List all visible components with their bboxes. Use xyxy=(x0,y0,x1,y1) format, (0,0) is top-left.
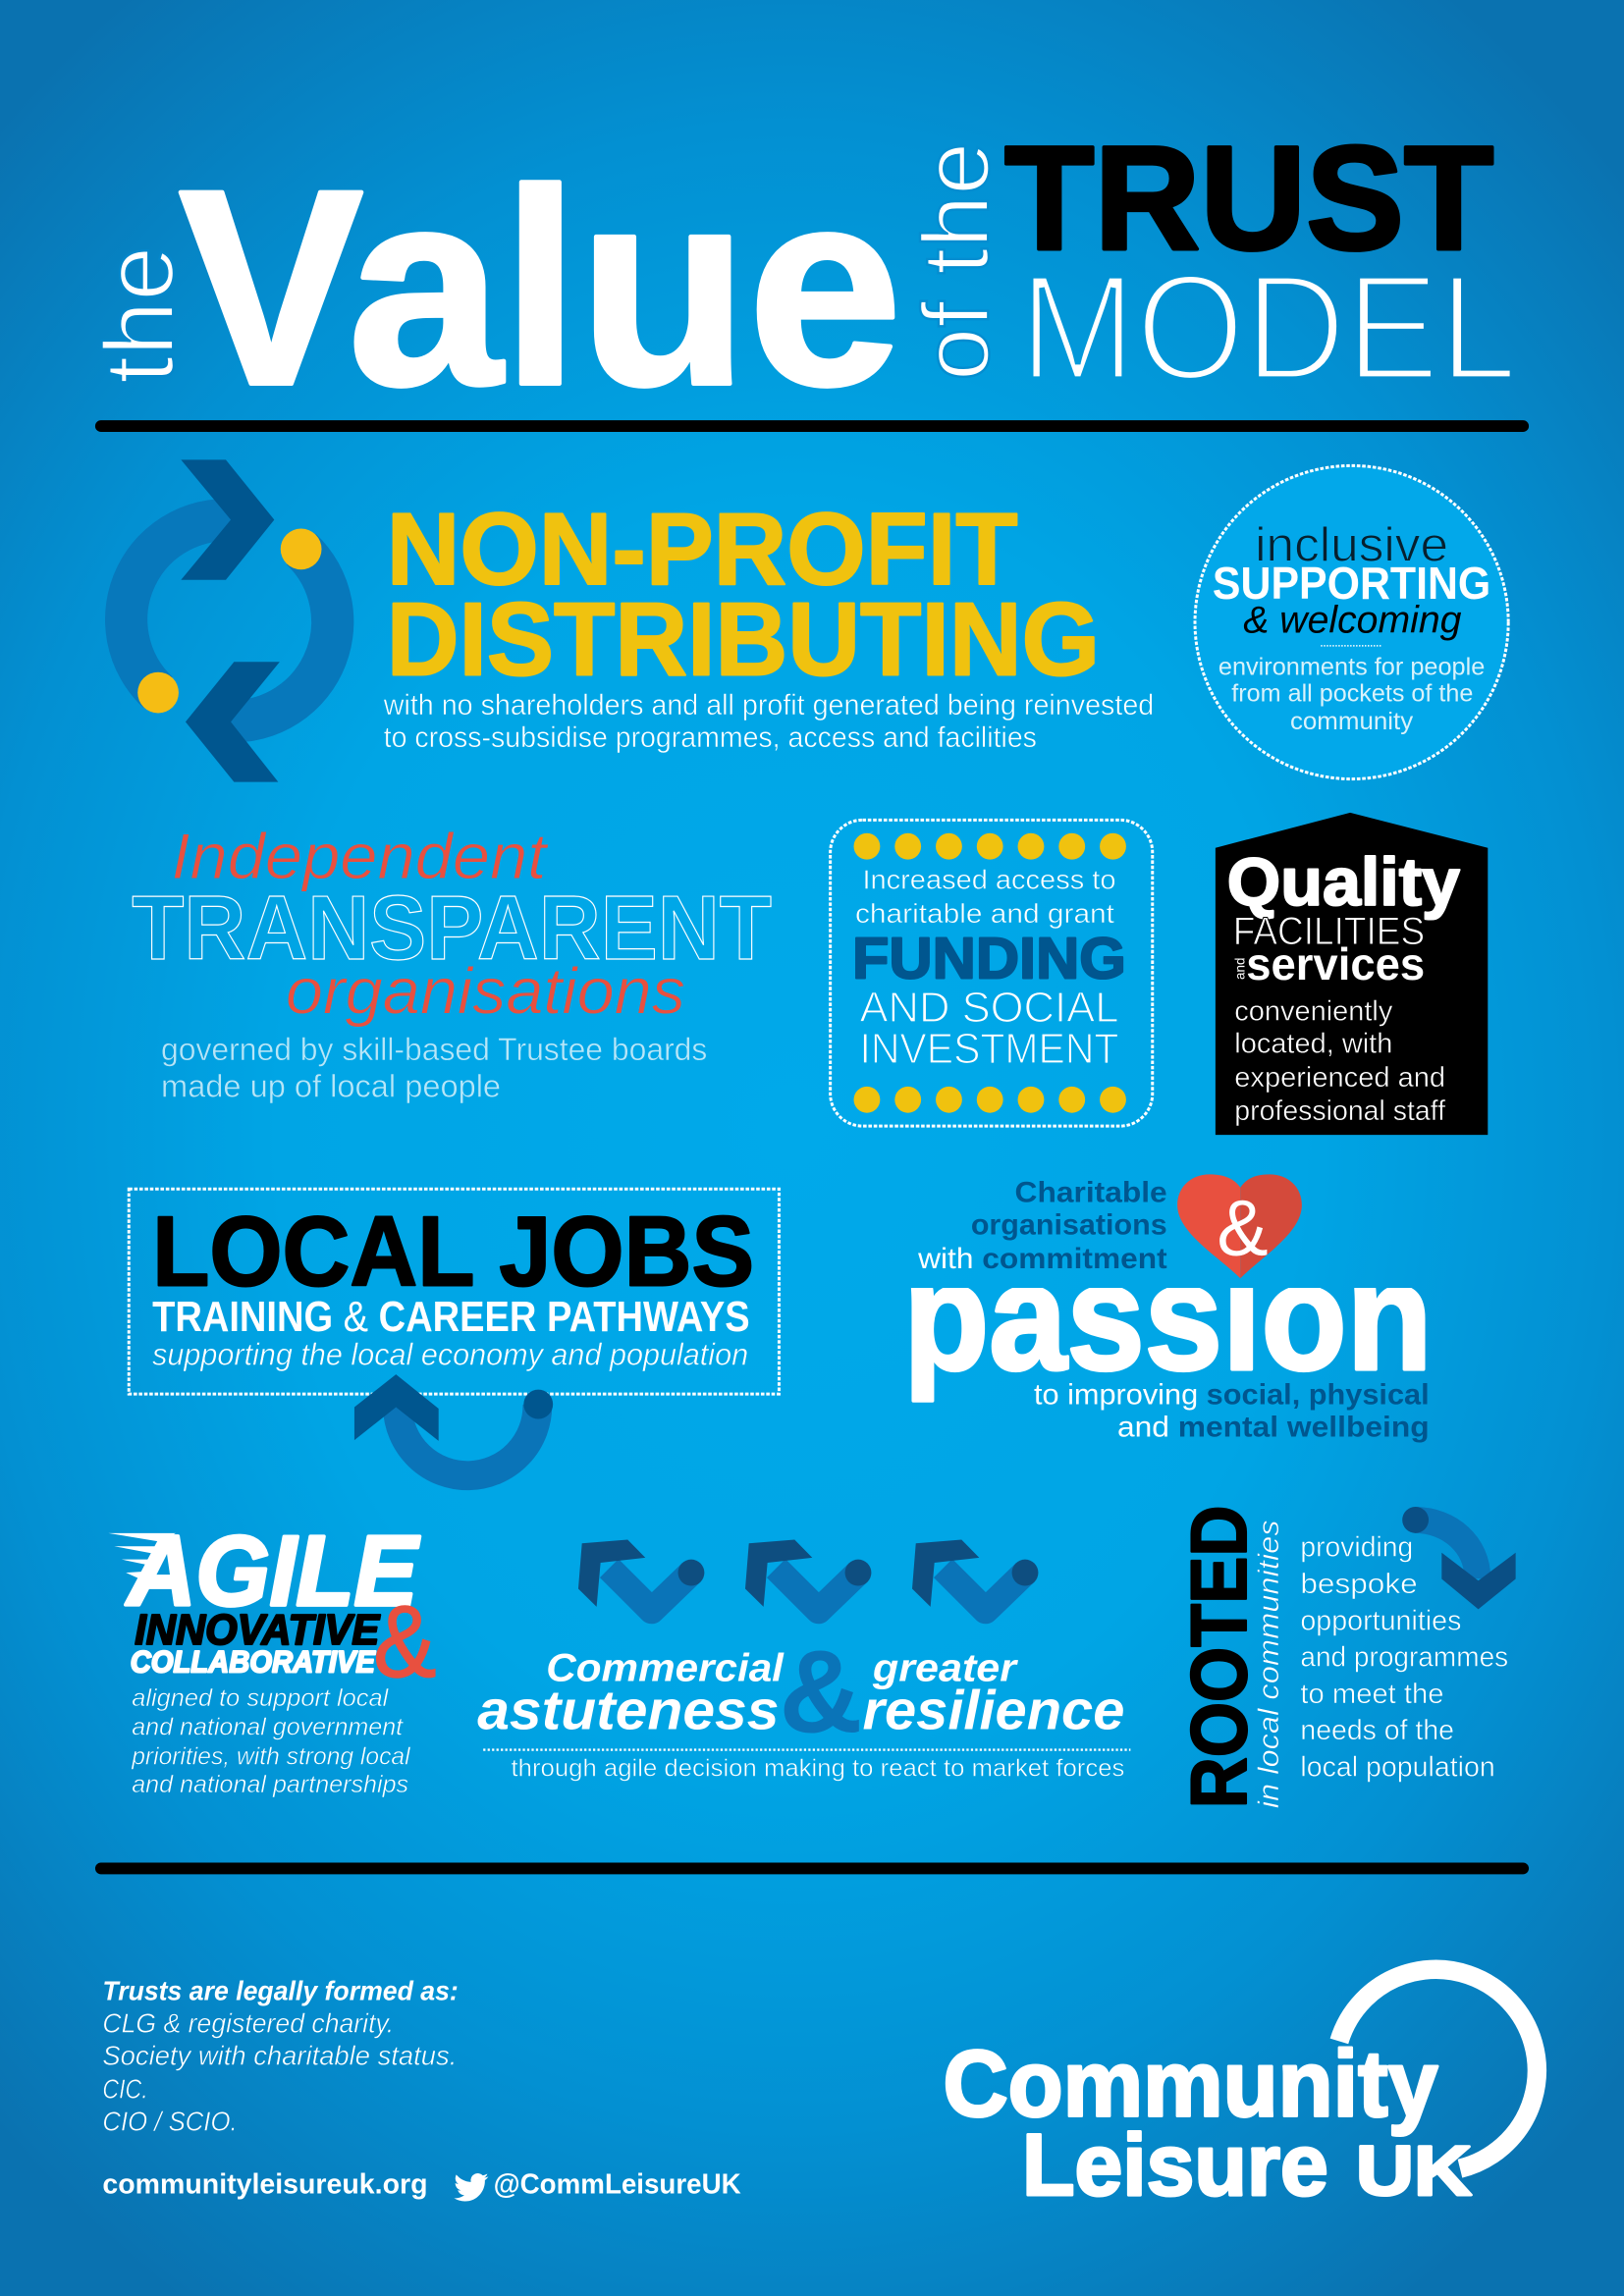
heading: agile: AGILE xyxy=(125,1516,420,1627)
text: opportunities: opportunities xyxy=(1300,1605,1461,1636)
heading: passion: passion xyxy=(903,1232,1433,1402)
panel: agile xyxy=(108,1516,436,1798)
text: priorities: priorities, with strong local xyxy=(131,1744,411,1771)
twitter handle: @CommLeisureUK xyxy=(494,2169,741,2201)
text: in local communities: in local communities xyxy=(1253,1520,1285,1808)
text: providing: providing xyxy=(1300,1532,1413,1564)
text: cross-subsidise: to cross-subsidise programmes, access and facilities xyxy=(384,721,1037,754)
text: charitable: Charitable xyxy=(1015,1177,1167,1209)
heading: local jobs: LOCAL JOBS xyxy=(152,1197,754,1308)
text: and: and xyxy=(1233,958,1248,980)
text: inclusive: inclusive xyxy=(1255,517,1448,571)
text: supporting: SUPPORTING xyxy=(1213,558,1490,609)
title xyxy=(85,116,1517,444)
text: to improving: to improving social, physical xyxy=(1034,1379,1430,1412)
text: commercial: Commercial xyxy=(546,1645,785,1689)
title word: the: the xyxy=(85,246,194,384)
logo word: community: Community xyxy=(943,2033,1438,2137)
text: national government: and national government xyxy=(132,1715,404,1741)
panel: funding xyxy=(831,820,1153,1126)
text: professional: professional staff xyxy=(1234,1095,1445,1127)
text: experienced: experienced and xyxy=(1234,1062,1445,1094)
text: organisations: organisations xyxy=(286,954,685,1028)
icon: yellow dots top xyxy=(854,833,1126,860)
title words: of the: of the xyxy=(905,142,1009,381)
title word: TRUST: TRUST xyxy=(1004,116,1493,281)
text: bespoke: bespoke xyxy=(1300,1569,1418,1600)
title word: MODEL: MODEL xyxy=(1019,242,1517,411)
heading: funding: FUNDING xyxy=(852,925,1126,990)
icon: circular arrows xyxy=(127,459,333,782)
icon: up arrow arc xyxy=(354,1374,553,1475)
text: welcoming: & welcoming xyxy=(1243,599,1462,641)
text: partnerships: and national partnerships xyxy=(132,1772,408,1798)
text: CLG: CLG & registered charity. xyxy=(102,2007,394,2038)
icon: heart xyxy=(1177,1174,1302,1278)
text: charitable and grant: charitable and grant xyxy=(855,898,1114,929)
icon: down arrow xyxy=(1402,1507,1516,1609)
text: and programmes: and programmes xyxy=(1300,1642,1508,1674)
text: astuteness: astuteness xyxy=(477,1681,779,1742)
ampersand: & xyxy=(373,1584,436,1699)
text: community: community xyxy=(1290,709,1414,735)
text: greater: greater xyxy=(872,1645,1019,1689)
logo: community leisure uk xyxy=(943,1969,1537,2214)
panel: non-profit distributing xyxy=(383,492,1154,754)
panel: legal forms xyxy=(102,1976,459,2136)
text: no shareholders: with no shareholders and all profit generated being reinvested xyxy=(383,689,1154,721)
text: resilience: resilience xyxy=(862,1681,1124,1742)
ampersand: & xyxy=(779,1628,862,1758)
heading: distributing: DISTRIBUTING xyxy=(387,582,1100,698)
text: through agile: through agile decision making to react to market forces xyxy=(512,1754,1124,1782)
heading: rooted: ROOTED xyxy=(1175,1505,1264,1808)
text: trustee boards: governed by skill-based Trustee boards xyxy=(161,1031,707,1067)
text: and social: AND SOCIAL xyxy=(859,985,1118,1032)
text: to meet the: to meet the xyxy=(1300,1679,1444,1710)
icon: three arrows xyxy=(578,1540,1038,1611)
panel: independent transparent xyxy=(132,821,772,1103)
text: supporting local economy: supporting the local economy and population xyxy=(152,1337,748,1371)
panel: local jobs xyxy=(129,1189,779,1394)
text: mental wellbeing: and mental wellbeing xyxy=(1117,1411,1430,1443)
text: needs of the: needs of the xyxy=(1300,1715,1454,1746)
top divider xyxy=(95,420,1529,432)
text: from all pockets: from all pockets of the xyxy=(1231,681,1473,708)
text: CIO: CIO / SCIO. xyxy=(102,2106,238,2136)
outline heading: transparent: TRANSPARENT xyxy=(132,877,772,979)
text: aligned to support: aligned to support local xyxy=(132,1685,390,1712)
text: facilities: FACILITIES xyxy=(1233,909,1425,953)
icon: heart: & xyxy=(1217,1184,1269,1272)
subheading: training and career pathways: TRAINING & CAREER PATHWAYS xyxy=(152,1294,750,1341)
text: environments: environments for people xyxy=(1218,655,1485,681)
text: trusts heading: Trusts are legally formed as: xyxy=(102,1976,459,2006)
website: communityleisureuk.org xyxy=(102,2169,427,2201)
panel: commercial astuteness xyxy=(477,1628,1130,1782)
logo word: leisure: Leisure xyxy=(1022,2115,1328,2214)
bottom divider xyxy=(95,1862,1529,1874)
icon: yellow dots bottom xyxy=(854,1087,1126,1113)
panel: rooted xyxy=(1175,1505,1516,1808)
text: local population: local population xyxy=(1300,1751,1495,1783)
logo word: UK: UK xyxy=(1356,2132,1472,2211)
text: conveniently: conveniently xyxy=(1234,996,1393,1028)
text: located: located, with xyxy=(1234,1029,1392,1060)
icon: twitter bird xyxy=(454,2173,488,2202)
text: CIC: CIC. xyxy=(102,2074,148,2105)
text: services: services xyxy=(1246,938,1425,989)
panel: passion xyxy=(903,1174,1433,1443)
heading: collaborative: COLLABORATIVE xyxy=(131,1645,376,1680)
text: local people: made up of local people xyxy=(161,1067,501,1103)
panel: inclusive circle xyxy=(1195,465,1508,779)
text: with commitment: with commitment xyxy=(917,1243,1167,1275)
text: society: Society with charitable status. xyxy=(102,2040,457,2070)
heading: non-profit: NON-PROFIT xyxy=(387,492,1018,607)
text: organisations: organisations xyxy=(971,1209,1167,1242)
text: investment: INVESTMENT xyxy=(859,1026,1118,1073)
text: independent: Independent xyxy=(171,821,549,892)
title word: Value: Value xyxy=(179,133,902,444)
panel: quality house xyxy=(1216,813,1488,1135)
heading: quality: Quality xyxy=(1227,844,1460,920)
icon: speed lines xyxy=(108,1533,176,1580)
text: increased access: Increased access to xyxy=(862,864,1115,894)
heading: innovative: INNOVATIVE xyxy=(135,1607,380,1654)
